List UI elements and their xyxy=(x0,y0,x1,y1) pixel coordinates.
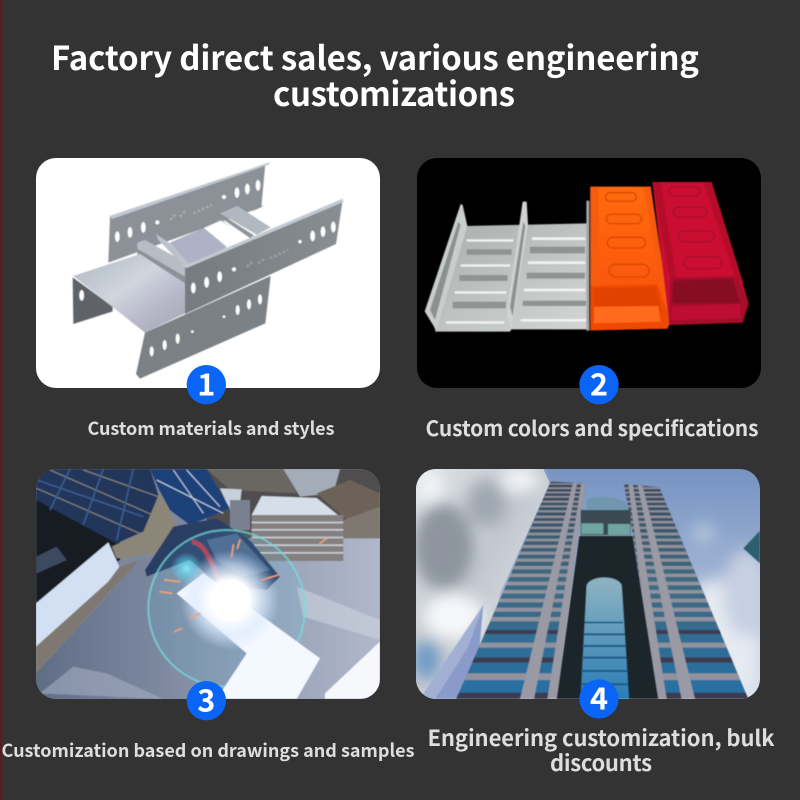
embossed mark on back rail xyxy=(170,205,212,220)
caption 2: Custom colors and specifications xyxy=(426,413,758,443)
badge 3: 3 xyxy=(197,675,215,720)
panel: custom materials and styles xyxy=(36,158,380,404)
lower front rail xyxy=(136,276,271,379)
badge 2 xyxy=(579,359,619,404)
badge 4: 4 xyxy=(590,674,608,719)
right distant building xyxy=(743,531,760,563)
table surface xyxy=(36,538,380,699)
front upper rail xyxy=(185,200,343,314)
panel: engineering customization xyxy=(410,467,777,719)
sleeve xyxy=(36,469,160,543)
title xyxy=(51,32,699,116)
clouds xyxy=(690,519,760,699)
stack of plates xyxy=(251,495,338,516)
distant spire xyxy=(435,606,484,699)
left side of lower tray xyxy=(73,277,113,324)
silver trays xyxy=(435,223,589,332)
glove xyxy=(111,491,178,560)
lower tray plate xyxy=(73,254,185,333)
badge 3 xyxy=(187,675,226,720)
workshop background xyxy=(207,469,380,539)
badge 4 xyxy=(579,674,619,719)
tower wing left xyxy=(456,481,586,699)
glass column xyxy=(581,577,629,699)
title: Factory direct sales, various engineering xyxy=(51,32,699,80)
caption 1: Custom materials and styles xyxy=(88,415,335,441)
caption 4 xyxy=(428,721,775,778)
welded workpiece xyxy=(177,573,320,699)
title: customizations xyxy=(273,68,515,116)
sparks xyxy=(160,538,327,632)
caption 4: Engineering customization, bulk xyxy=(428,721,775,753)
rungs xyxy=(220,206,271,235)
torch xyxy=(192,542,222,583)
panel: customization based on drawings xyxy=(36,469,380,720)
red tray xyxy=(652,182,749,325)
lens flare ring xyxy=(148,530,305,687)
badge 1: 1 xyxy=(197,359,215,404)
orange tray xyxy=(590,187,671,330)
dark left area and steel channel xyxy=(36,500,120,603)
back side rail xyxy=(108,164,265,263)
tower wing right xyxy=(624,484,748,699)
caption 4: discounts xyxy=(550,746,652,778)
badge 1 xyxy=(187,359,226,404)
badge 2: 2 xyxy=(590,359,608,404)
middle plate and opening xyxy=(170,220,230,247)
caption 3: Customization based on drawings and samples xyxy=(2,737,415,763)
panel: custom colors and specifications xyxy=(417,158,761,404)
tower centre xyxy=(586,497,628,510)
